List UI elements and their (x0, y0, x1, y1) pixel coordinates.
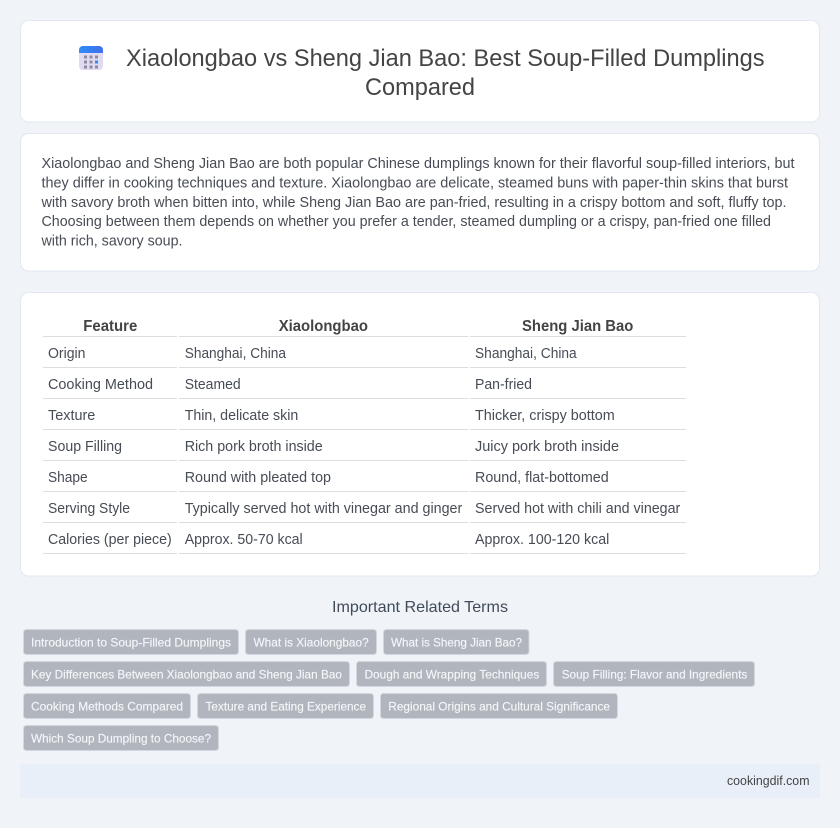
heading: Compared (365, 74, 475, 101)
tag (380, 694, 618, 718)
tag: Key Differences Between Xiaolongbao and Sheng Jian Bao (31, 668, 342, 682)
tag: What is Xiaolongbao? (254, 636, 369, 650)
table header: Xiaolongbao (279, 318, 368, 335)
text block: description: Xiaolongbao and Sheng Jian Bao are both popular Chinese dumplings known for their flavorful soup-filled interiors, but (42, 156, 794, 172)
row: cooking method (48, 377, 532, 393)
row: origin: Origin (48, 346, 86, 362)
row: shape (48, 470, 609, 486)
text block: description: with rich, savory soup. (41, 234, 182, 250)
row: soup filling (48, 439, 619, 455)
tag: Introduction to Soup-Filled Dumplings (31, 636, 231, 650)
row: texture (48, 408, 615, 424)
tags: related terms (24, 630, 754, 750)
tag: Which Soup Dumpling to Choose? (31, 732, 211, 746)
row: serving style: Served hot with chili and vinegar (475, 501, 681, 517)
row: shape: Round with pleated top (185, 470, 331, 486)
row: serving style: Typically served hot with vinegar and ginger (185, 501, 463, 517)
row: soup filling: Juicy pork broth inside (475, 439, 619, 455)
row: texture: Thin, delicate skin (185, 408, 298, 424)
tag (246, 630, 376, 654)
row: calories (48, 532, 609, 548)
footer: cookingdif.com (727, 773, 810, 788)
tag (356, 662, 546, 686)
tag (198, 694, 374, 718)
panel: comparison table (20, 292, 820, 576)
panel: title (20, 20, 820, 122)
row: shape: Round, flat-bottomed (475, 470, 609, 486)
row: calories: Approx. 100-120 kcal (475, 532, 609, 548)
tag: Dough and Wrapping Techniques (364, 668, 539, 682)
row: calories: Calories (per piece) (48, 532, 172, 548)
row: serving style (48, 501, 681, 517)
tag (24, 630, 238, 654)
icon: calendar (79, 46, 103, 70)
row: texture: Texture (48, 408, 95, 424)
row: texture: Thicker, crispy bottom (475, 408, 615, 424)
row: origin (48, 346, 577, 362)
panel: description (20, 134, 820, 271)
row: origin: Shanghai, China (475, 346, 577, 362)
tag: Soup Filling: Flavor and Ingredients (562, 668, 747, 682)
heading: Xiaolongbao vs Sheng Jian Bao: Best Soup-Filled Dumplings (126, 45, 764, 72)
row: calories: Approx. 50-70 kcal (185, 532, 303, 548)
tag (384, 630, 529, 654)
tag (24, 662, 350, 686)
row: cooking method: Steamed (185, 377, 241, 393)
heading: important related terms: Important Related Terms (332, 599, 508, 616)
row: cooking method: Pan-fried (475, 377, 532, 393)
tag: What is Sheng Jian Bao? (391, 636, 522, 650)
table header: Sheng Jian Bao (522, 318, 634, 335)
tag: Regional Origins and Cultural Significance (388, 700, 610, 714)
row: shape: Shape (48, 470, 88, 486)
text block: description: with savory broth when bitten into, while Sheng Jian Bao are pan-fried, resulting in a crispy bottom and soft, fluffy top. (41, 195, 787, 211)
row: origin: Shanghai, China (185, 346, 286, 362)
tag: Texture and Eating Experience (206, 700, 366, 714)
row: soup filling: Soup Filling (48, 439, 122, 455)
text block: description: Choosing between them depends on whether you prefer a tender, steamed dumpling or a crispy, pan-fried one filled (42, 214, 771, 230)
tag (24, 726, 218, 750)
row: soup filling: Rich pork broth inside (185, 439, 323, 455)
heading (126, 45, 764, 101)
tag (554, 662, 754, 686)
row: cooking method: Cooking Method (48, 377, 153, 393)
row: serving style: Serving Style (48, 501, 130, 517)
tag (24, 694, 190, 718)
text block: description (41, 156, 795, 250)
tag: Cooking Methods Compared (31, 700, 183, 714)
table header (83, 318, 634, 335)
table header: Feature (83, 318, 137, 335)
text block: description: they differ in cooking techniques and texture. Xiaolongbao are delicate, steamed buns with paper-thin skins that burst (42, 175, 788, 191)
footer (20, 764, 820, 798)
